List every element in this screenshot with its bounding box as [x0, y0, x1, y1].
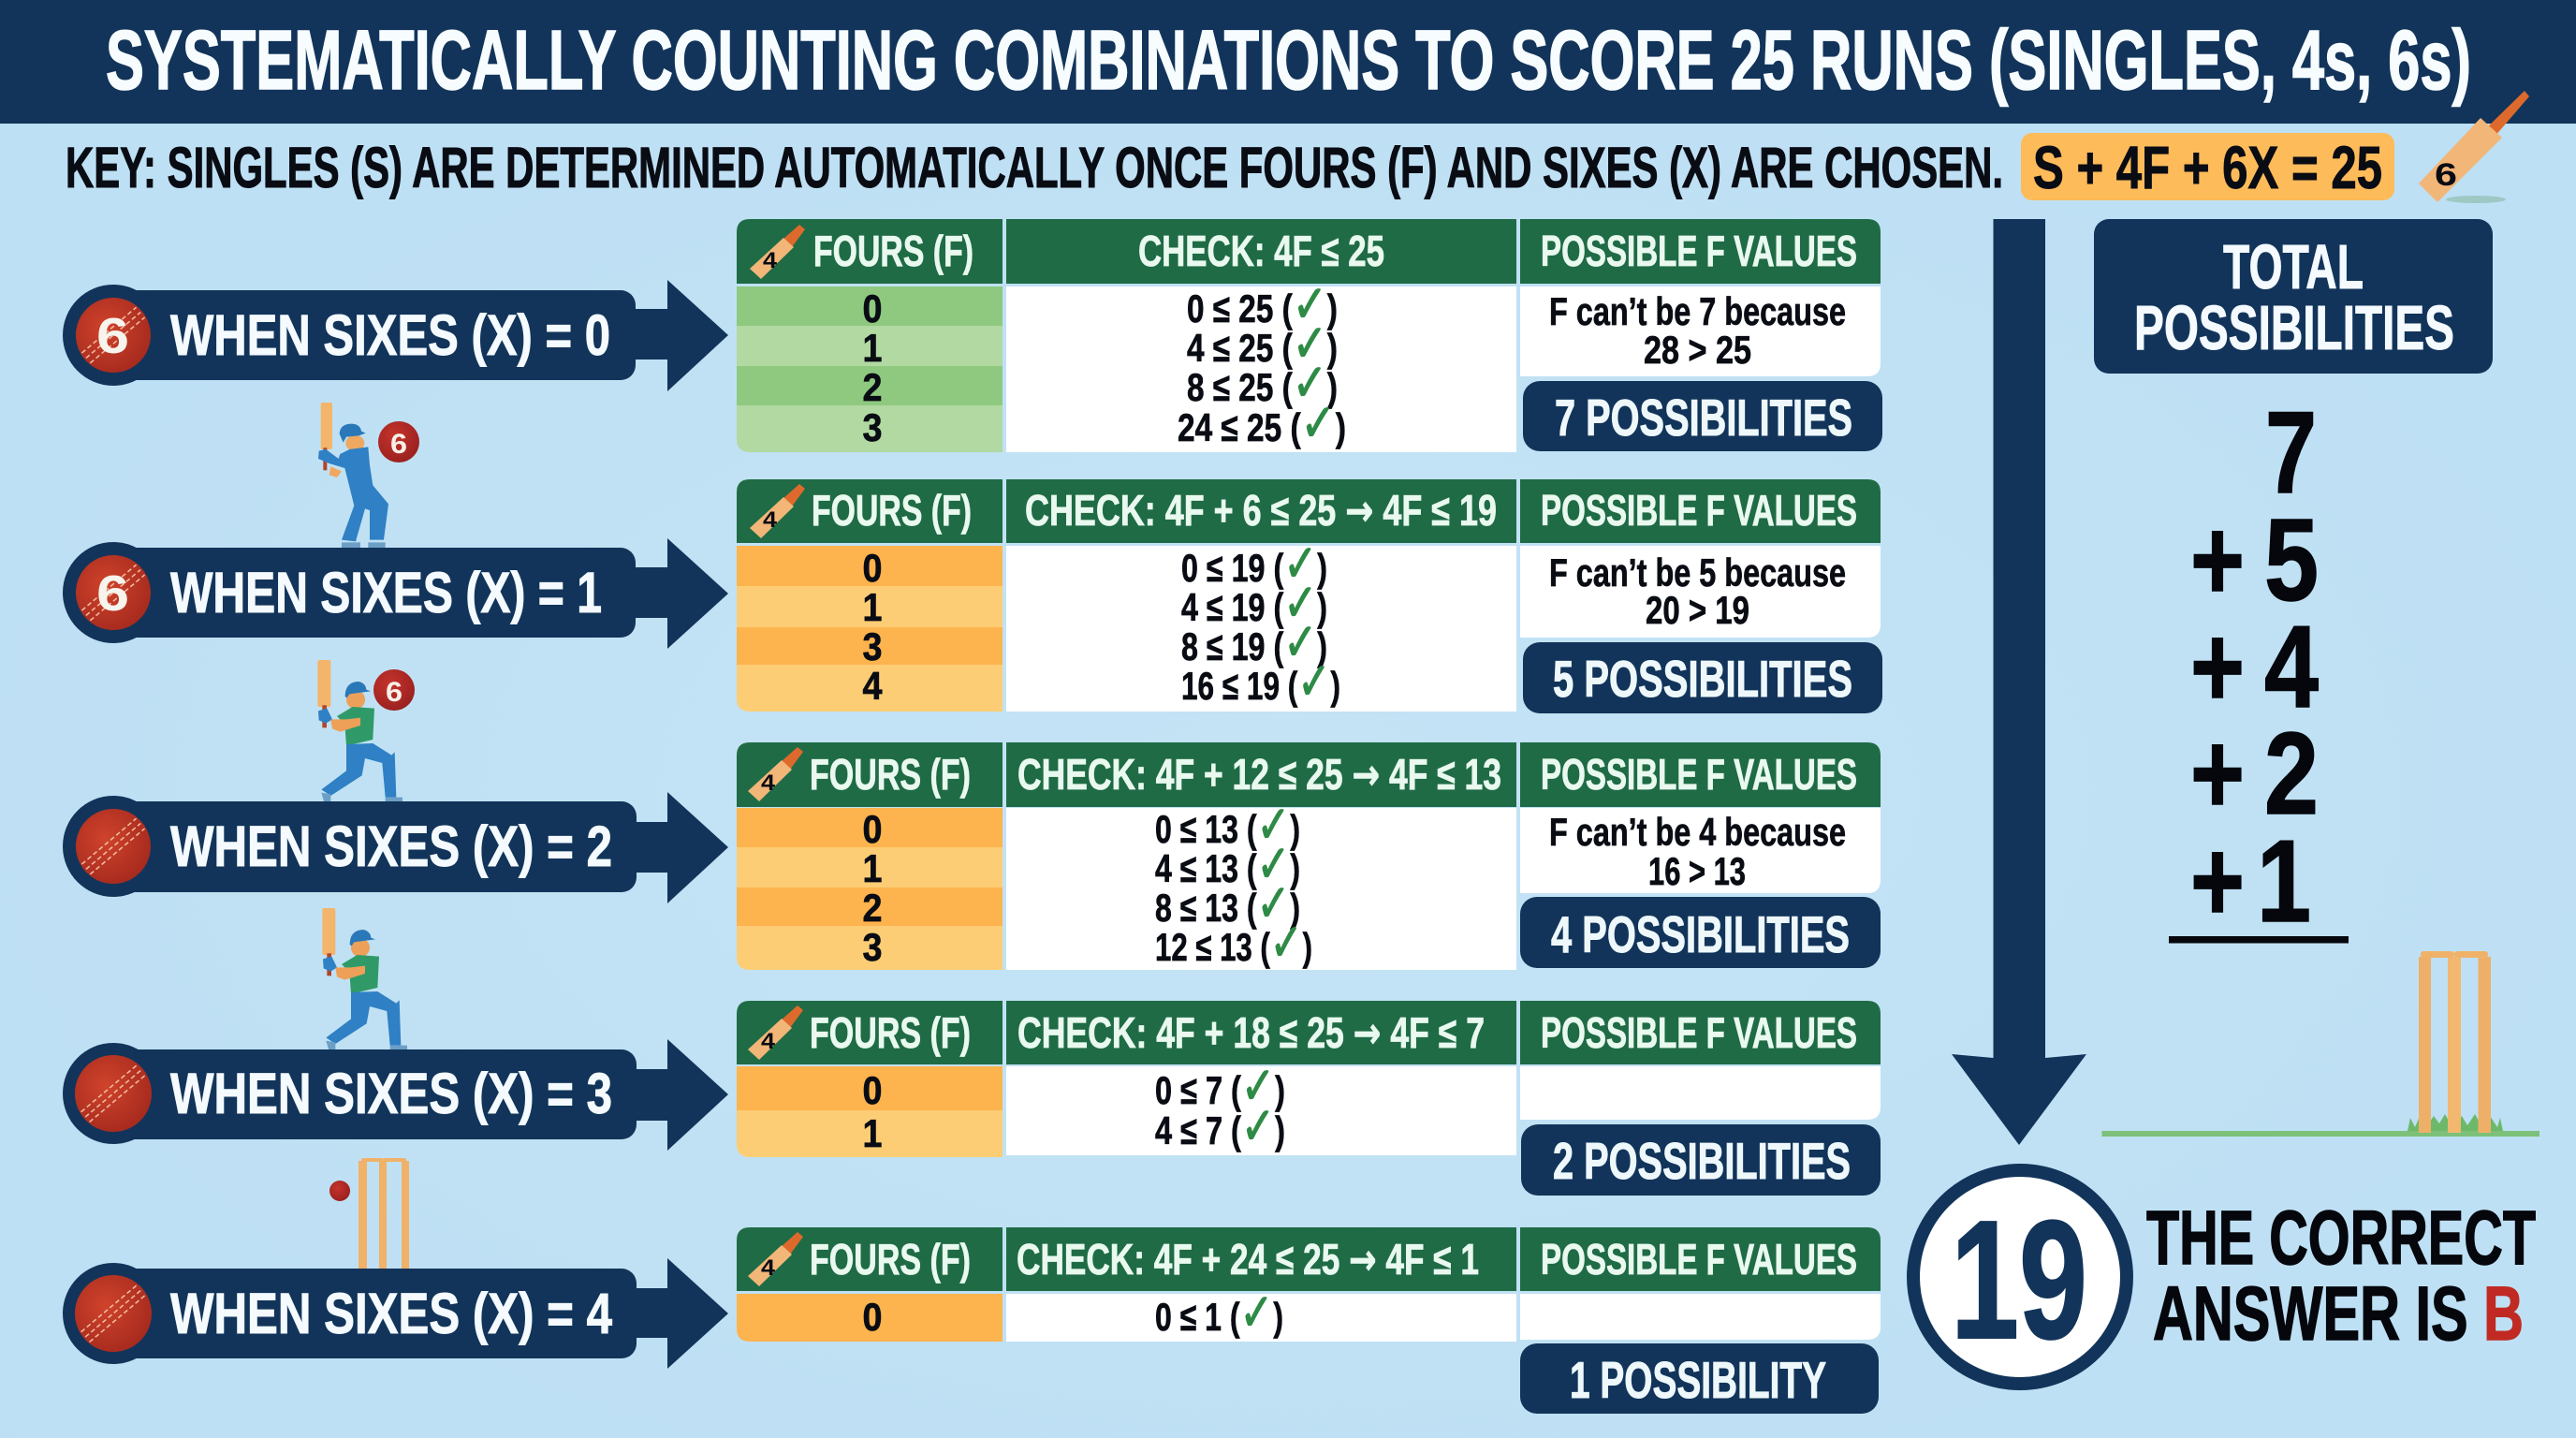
check column: [1006, 274, 1516, 454]
note cell: [1520, 808, 1881, 893]
check column: 4 ≤ 13 (✓): [1155, 834, 1300, 895]
banner: sixes = 1: [63, 538, 728, 649]
note cell: 28 > 25: [1644, 328, 1751, 372]
panel: table for sixes = 4: [737, 1227, 1881, 1414]
note cell: [1520, 286, 1881, 376]
table header: FOURS (F): [810, 750, 971, 799]
icon: ball with 6: 6: [96, 308, 129, 364]
sum of possibilities: 4: [2264, 603, 2319, 732]
banner: sixes = 4: WHEN SIXES (X) = 4: [170, 1282, 612, 1345]
check column: 8 ≤ 19 (✓): [1181, 612, 1327, 673]
check column: 0 ≤ 13 (✓): [1155, 795, 1300, 856]
check column: 0 ≤ 25 (✓): [1187, 274, 1338, 335]
table header: FOURS (F): [812, 486, 972, 535]
sum of possibilities: 1: [2257, 817, 2311, 946]
fours column: 0: [863, 807, 882, 851]
answer circle: [1913, 1170, 2127, 1384]
banner: sixes = 1: WHEN SIXES (X) = 1: [170, 561, 602, 624]
fours column: [737, 807, 1003, 970]
icon: bat with 6: 6: [2435, 157, 2457, 193]
table header: POSSIBLE F VALUES: [1541, 1235, 1857, 1284]
result pill: [1523, 381, 1882, 451]
table header: 4: [763, 507, 778, 533]
result pill: 4 POSSIBILITIES: [1551, 905, 1850, 963]
sum of possibilities: +: [2190, 817, 2245, 946]
check column: [1006, 534, 1516, 712]
result pill: 7 POSSIBILITIES: [1555, 389, 1852, 447]
icon: ball with 6: 6: [96, 565, 129, 622]
fours column: 0: [863, 286, 882, 330]
illustration: batter in green: [322, 908, 407, 1050]
table header: POSSIBLE F VALUES: [1541, 486, 1857, 535]
panel: total possibilities heading: POSSIBILITIES: [2134, 293, 2454, 363]
table header: CHECK: 4F + 18 ≤ 25 → 4F ≤ 7: [1017, 1007, 1485, 1058]
illustration: batter in green with 6 ball: [317, 660, 415, 802]
check column: 8 ≤ 25 (✓): [1187, 353, 1338, 414]
sum of possibilities: 5: [2264, 496, 2319, 625]
note cell: [1520, 1294, 1881, 1340]
check column: [1006, 1056, 1516, 1157]
fours column: 0: [863, 546, 882, 590]
equation badge: S + 4F + 6X = 25: [2033, 134, 2382, 201]
table header: 4: [761, 1029, 776, 1054]
answer text: ANSWER IS B: [2153, 1271, 2524, 1357]
note cell: F can’t be 4 because: [1549, 810, 1846, 854]
illustration: batter in green with 6 ball: 6: [386, 677, 402, 708]
check column: 4 ≤ 25 (✓): [1187, 314, 1338, 374]
banner: sixes = 0: [63, 280, 728, 391]
fours column: 3: [863, 925, 882, 969]
result pill: [1521, 1124, 1881, 1196]
note cell: F can’t be 7 because: [1549, 289, 1846, 333]
result pill: 1 POSSIBILITY: [1570, 1351, 1826, 1409]
table header: CHECK: 4F ≤ 25: [1138, 227, 1384, 275]
fours column: 2: [863, 365, 882, 409]
fours column: 1: [863, 585, 882, 629]
arrow: down to the answer: [1952, 219, 2086, 1145]
fours column: 2: [863, 886, 882, 930]
check column: 0 ≤ 7 (✓): [1155, 1056, 1285, 1117]
check column: [1006, 795, 1516, 974]
table header: [737, 479, 1881, 543]
fours column: 3: [863, 405, 882, 449]
table header: [737, 1227, 1881, 1291]
sum of possibilities: 7: [2265, 389, 2317, 518]
icon: ball: [75, 1275, 152, 1352]
note cell: [1520, 1066, 1881, 1120]
table header: 4: [761, 1255, 776, 1281]
table header: CHECK: 4F + 6 ≤ 25 → 4F ≤ 19: [1025, 485, 1497, 536]
table header: CHECK: 4F + 24 ≤ 25 → 4F ≤ 1: [1017, 1234, 1479, 1284]
check column: 4 ≤ 19 (✓): [1181, 573, 1327, 634]
table header: CHECK: 4F + 12 ≤ 25 → 4F ≤ 13: [1017, 749, 1501, 800]
check column: 24 ≤ 25 (✓): [1178, 393, 1346, 454]
check column: 8 ≤ 13 (✓): [1155, 873, 1300, 934]
illustration: wicket on grass: [2102, 951, 2539, 1137]
banner: sixes = 2: WHEN SIXES (X) = 2: [170, 814, 612, 878]
table header: FOURS (F): [810, 1008, 971, 1057]
check column: 0 ≤ 19 (✓): [1181, 534, 1327, 594]
table header: POSSIBLE F VALUES: [1541, 1008, 1857, 1057]
table header: [737, 219, 1881, 284]
note cell: F can’t be 5 because: [1549, 550, 1846, 594]
fours column: 0: [863, 1295, 882, 1339]
panel: table for sixes = 0: [737, 219, 1882, 454]
fours column: [737, 546, 1003, 712]
fours column: [737, 1066, 1003, 1157]
panel: table for sixes = 2: [737, 742, 1881, 974]
answer text: [2146, 1196, 2536, 1357]
panel: table for sixes = 1: [737, 479, 1882, 713]
fours column: 4: [863, 664, 883, 708]
fours column: 3: [863, 624, 882, 668]
icon: ball with 6: [76, 298, 151, 373]
table header: POSSIBLE F VALUES: [1541, 750, 1857, 799]
table header: 4: [761, 770, 776, 796]
note cell: 20 > 19: [1646, 588, 1749, 632]
table header: [737, 742, 1881, 807]
banner: sixes = 3: WHEN SIXES (X) = 3: [170, 1062, 612, 1125]
note cell: 16 > 13: [1648, 849, 1746, 893]
fours column: [737, 286, 1003, 452]
check column: [1006, 1283, 1516, 1343]
table header: POSSIBLE F VALUES: [1541, 227, 1857, 275]
check column: 12 ≤ 13 (✓): [1155, 913, 1312, 974]
fours column: 0: [863, 1068, 882, 1112]
sum of possibilities: +: [2190, 496, 2245, 625]
illustration: batter in blue with 6 ball: 6: [390, 429, 407, 460]
illustration: wicket and ball: [329, 1158, 409, 1269]
result pill: [1520, 1343, 1879, 1414]
panel: table for sixes = 3: [737, 1001, 1881, 1196]
icon: ball with 6: [76, 555, 151, 630]
fours column: 1: [863, 1111, 882, 1155]
check column: 0 ≤ 1 (✓): [1155, 1283, 1283, 1343]
icon: ball: [76, 809, 151, 884]
check column: 16 ≤ 19 (✓): [1181, 652, 1340, 712]
icon: bat with 6: [2419, 91, 2529, 203]
check column: 4 ≤ 7 (✓): [1155, 1096, 1285, 1157]
note cell: [1520, 546, 1881, 638]
icon: ball: [75, 1055, 152, 1132]
sum of possibilities: [2169, 389, 2349, 946]
banner: sixes = 0: WHEN SIXES (X) = 0: [170, 303, 610, 367]
illustration: batter in blue with 6 ball: [318, 403, 419, 548]
answer circle: 19: [1951, 1186, 2087, 1374]
result pill: 2 POSSIBILITIES: [1553, 1132, 1851, 1190]
banner: sixes = 2: [63, 792, 728, 903]
fours column: [737, 1294, 1003, 1342]
sum of possibilities: 2: [2264, 710, 2319, 839]
panel: total possibilities heading: TOTAL: [2223, 232, 2364, 302]
panel: total possibilities heading: [2094, 219, 2493, 374]
table header: 4: [763, 248, 778, 273]
table header: [737, 1001, 1881, 1064]
banner: sixes = 3: [63, 1039, 728, 1151]
result pill: 5 POSSIBILITIES: [1553, 650, 1852, 708]
fours column: 1: [863, 846, 882, 890]
result pill: [1520, 897, 1881, 968]
table header: FOURS (F): [813, 227, 973, 275]
fours column: 1: [863, 326, 882, 370]
banner: sixes = 4: [63, 1258, 728, 1369]
sum of possibilities: +: [2190, 710, 2245, 839]
sum of possibilities: +: [2190, 603, 2245, 732]
result pill: [1523, 642, 1882, 713]
table header: FOURS (F): [810, 1235, 971, 1284]
